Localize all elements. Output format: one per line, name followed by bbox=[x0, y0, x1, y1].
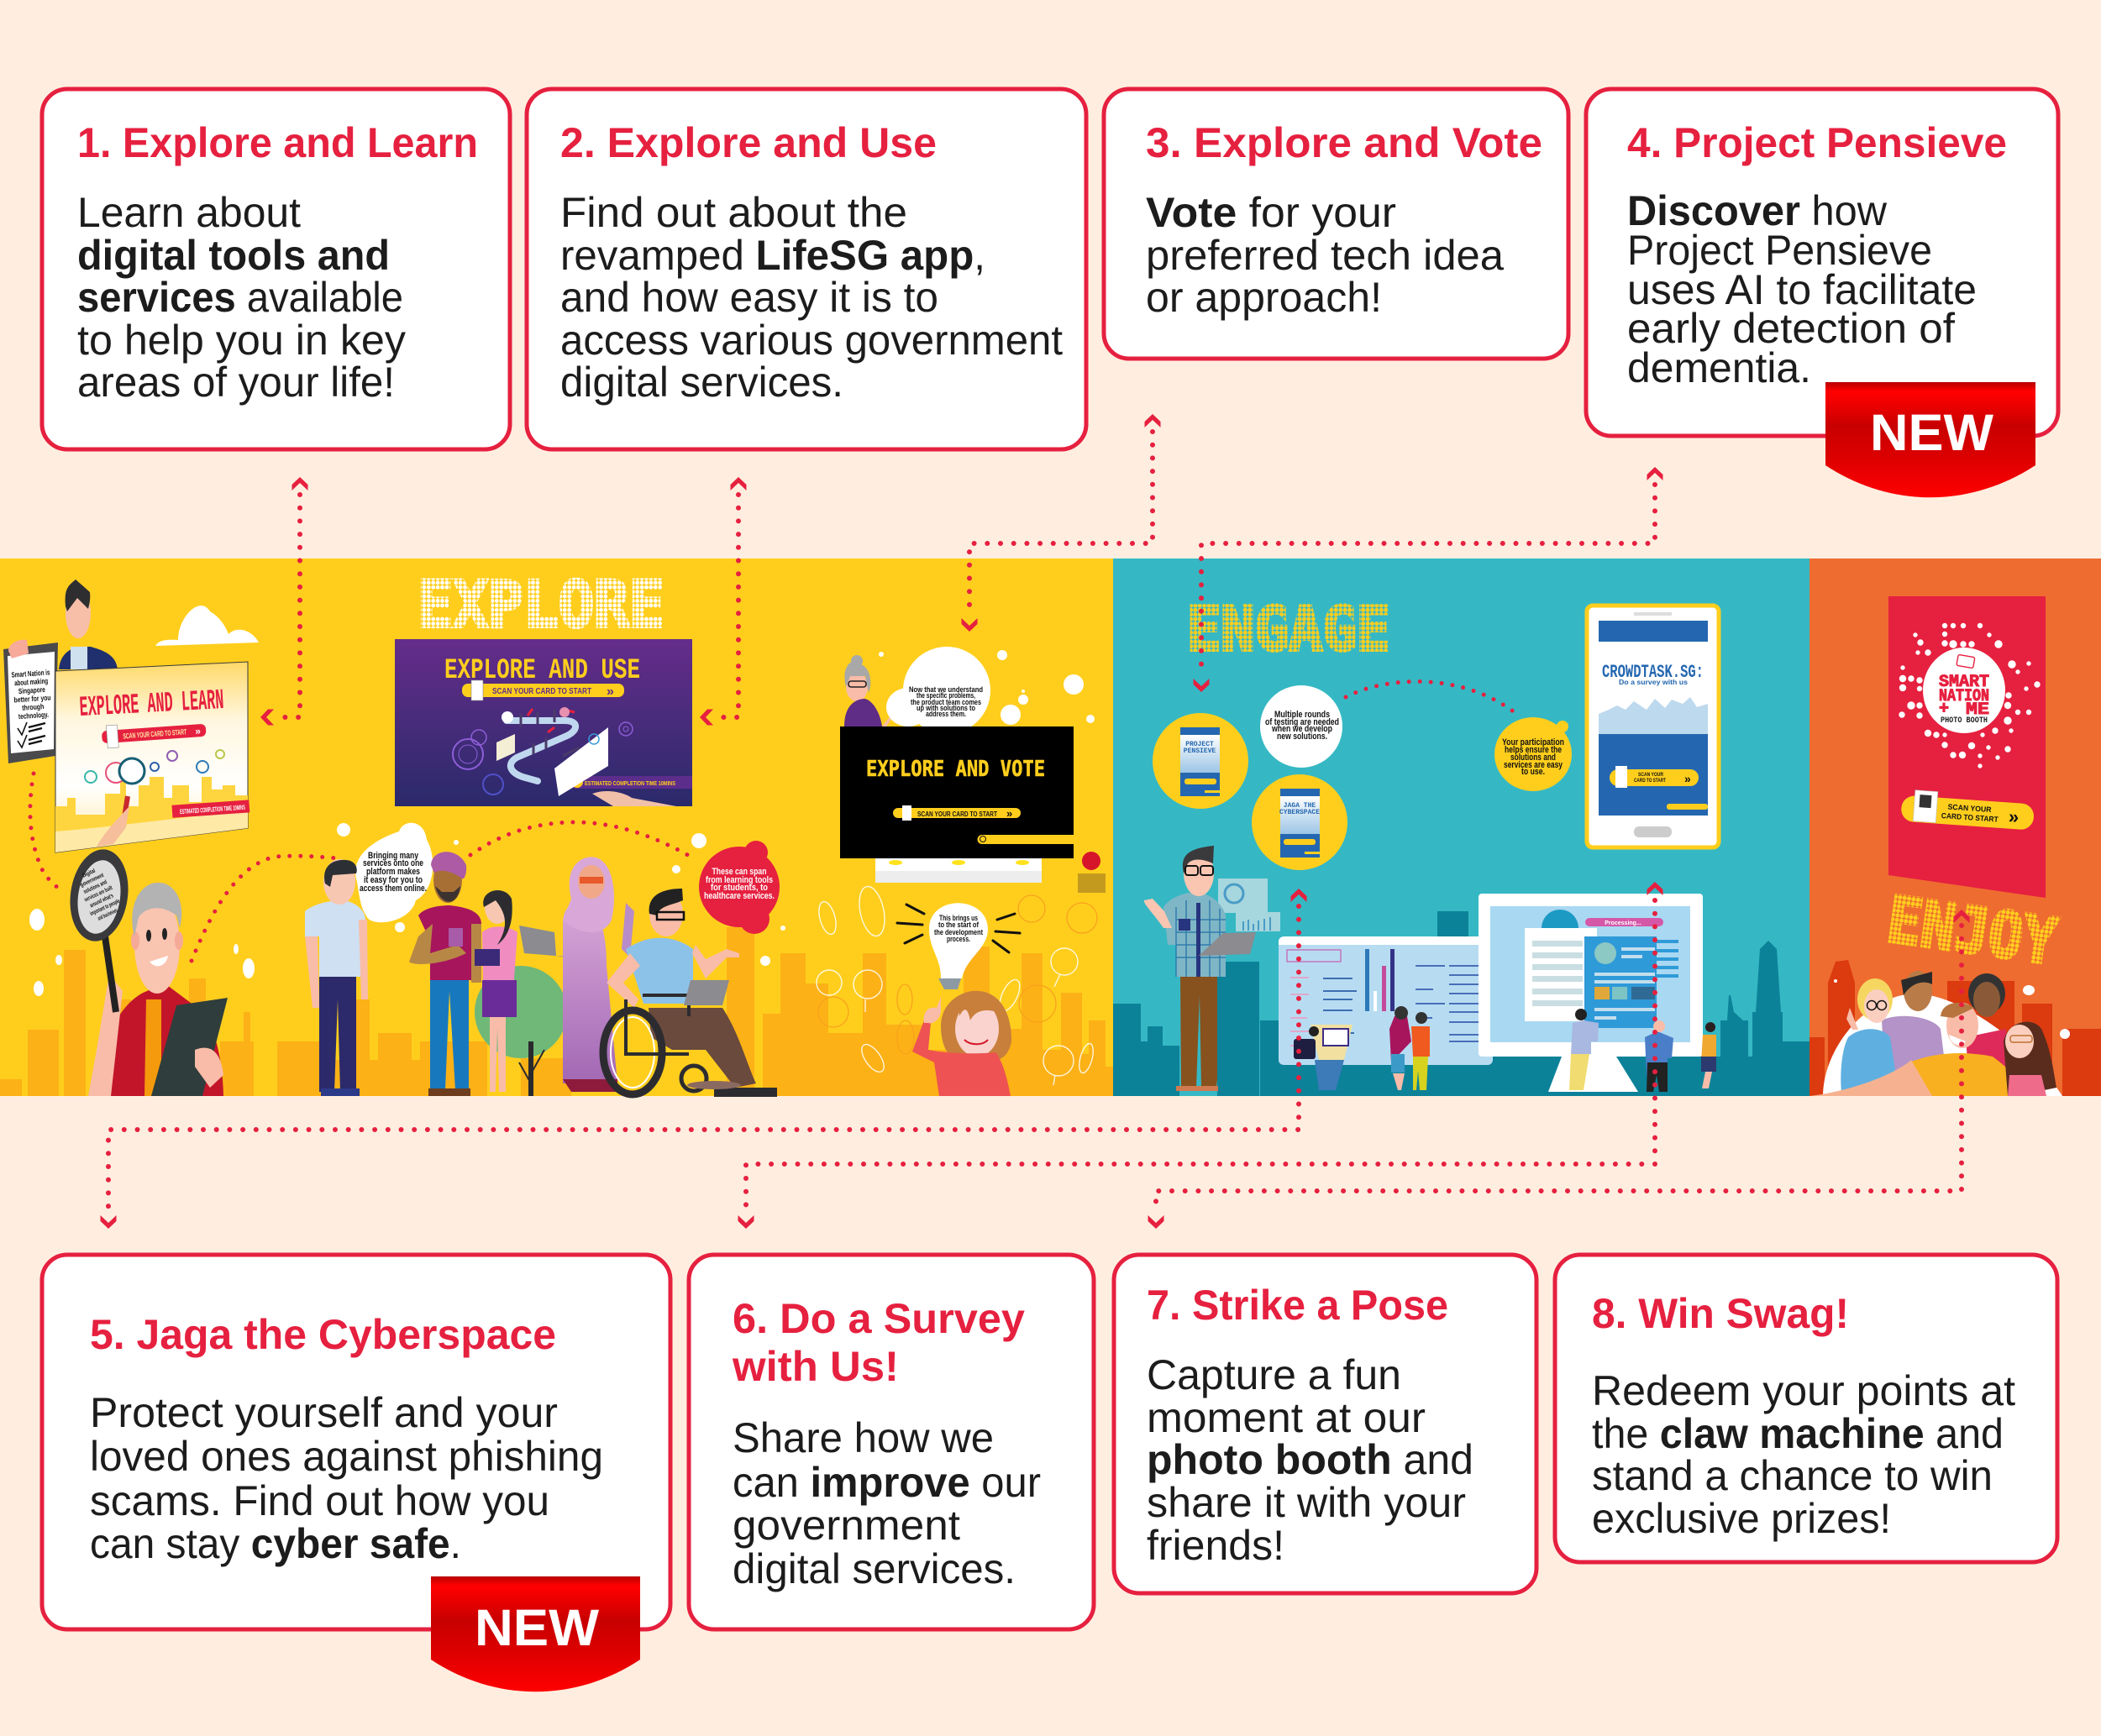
halftone dots bbox=[1899, 623, 2040, 768]
white backdrop bbox=[1823, 994, 2062, 1096]
phone subtitle: Do a survey with us bbox=[1619, 679, 1689, 686]
clipboard text: Smart Nation is bbox=[11, 668, 50, 679]
woman with dark hair bbox=[1966, 973, 2008, 1096]
processing bar bbox=[1585, 918, 1663, 926]
bubble: bringing many services: access them online. bbox=[360, 884, 427, 894]
skyline: explore zone bbox=[0, 927, 1113, 1096]
new ribbon: NEW bbox=[475, 1599, 599, 1656]
circle: jaga the cyberspace: JAGA THE bbox=[1284, 802, 1316, 810]
body text: can improve our bbox=[733, 1459, 1041, 1506]
bubble: your participation: to use. bbox=[1521, 767, 1545, 777]
heading: ENGAGE: ENGAGE bbox=[1187, 594, 1390, 664]
body text: Redeem your points at bbox=[1592, 1367, 2015, 1414]
screen title: EXPLORE AND VOTE bbox=[866, 757, 1045, 782]
bubble: multiple rounds: of testing are needed bbox=[1265, 717, 1339, 727]
estimated time bar: ESTIMATED COMPLETION TIME 10MINS bbox=[180, 804, 245, 816]
faint bulbs bbox=[818, 895, 1097, 1054]
business man bbox=[1645, 1020, 1673, 1092]
body text: exclusive prizes! bbox=[1592, 1495, 1891, 1542]
phone skyline bbox=[1599, 697, 1708, 734]
screen: explore and learn: EXPLORE AND LEARN bbox=[79, 685, 224, 725]
progress bar bbox=[978, 835, 1074, 844]
body text: Learn about bbox=[77, 189, 301, 236]
scan pill bbox=[1900, 789, 2035, 831]
clipboard text: Singapore bbox=[18, 685, 45, 695]
body text: moment at our bbox=[1147, 1394, 1426, 1441]
figure: older man with clipboard bbox=[88, 883, 228, 1096]
body text: Protect yourself and your bbox=[90, 1389, 558, 1436]
dotted link: man to group bbox=[192, 856, 338, 961]
bulb with text: the development bbox=[934, 928, 983, 936]
poster: photo booth bbox=[1888, 596, 2046, 898]
screen: explore and learn bbox=[55, 662, 249, 852]
magnifier text: services are built bbox=[84, 885, 114, 903]
scan pill: » bbox=[607, 684, 614, 699]
body text bbox=[560, 189, 1063, 406]
body text: the claw machine and bbox=[1592, 1410, 2004, 1457]
panel: explore zone bbox=[0, 559, 1113, 1097]
heading: 7. Strike a Pose bbox=[1147, 1282, 1448, 1329]
holographic panels bbox=[1218, 878, 1280, 931]
bulb with text: process. bbox=[947, 935, 970, 943]
dotted link: group to red bubble bbox=[470, 822, 696, 860]
magnifier text: government bbox=[80, 873, 105, 889]
body text bbox=[1627, 187, 1977, 391]
scan pill: » bbox=[2008, 806, 2020, 827]
poster title bbox=[1939, 673, 1989, 726]
body text: government bbox=[733, 1502, 960, 1549]
panel: enjoy zone bbox=[1809, 559, 2101, 1096]
arrow: up to cyberspace bbox=[1290, 889, 1307, 902]
circle: project pensieve: PROJECT bbox=[1185, 741, 1214, 748]
bubble: multiple rounds: new solutions. bbox=[1277, 732, 1327, 742]
body text bbox=[90, 1389, 603, 1567]
panel: card 7 strike a pose bbox=[1114, 1255, 1536, 1593]
new ribbon bbox=[431, 1576, 640, 1691]
bubble: your participation: solutions and bbox=[1510, 753, 1556, 763]
red button bbox=[1082, 852, 1100, 870]
small skyline on screen bbox=[55, 777, 248, 831]
poster title: NATION bbox=[1939, 687, 1989, 706]
body text bbox=[1592, 1367, 2015, 1542]
bulb with text: This brings us bbox=[939, 914, 978, 922]
white dots bbox=[29, 650, 1095, 996]
circle: project pensieve: PENSIEVE bbox=[1184, 747, 1216, 755]
body text: revamped LifeSG app, bbox=[560, 232, 985, 279]
outlined bulbs bbox=[816, 884, 1095, 1085]
poster title: PHOTO BOOTH bbox=[1941, 716, 1988, 726]
bubble: product team: Now that we understand bbox=[909, 685, 983, 694]
new ribbon bbox=[1825, 382, 2035, 497]
body text: dementia. bbox=[1627, 344, 1811, 391]
circle: jaga the cyberspace: CYBERSPACE bbox=[1279, 809, 1320, 816]
time bar text: ESTIMATED COMPLETION TIME 10MINS bbox=[585, 779, 675, 787]
monitor bbox=[1479, 894, 1703, 1092]
bubble: bringing many services: it easy for you to bbox=[364, 875, 423, 885]
body text bbox=[1146, 189, 1504, 321]
panel: card 6 do a survey bbox=[689, 1255, 1094, 1629]
panel: card 1 explore and learn bbox=[42, 89, 510, 449]
magnifier text bbox=[73, 864, 124, 924]
bubble: bringing many services bbox=[355, 823, 433, 922]
bubble: red learning tools: for students, to bbox=[711, 883, 768, 893]
figure: grandmother bbox=[844, 655, 903, 726]
body text: areas of your life! bbox=[77, 359, 395, 406]
magnifier text: solutions and bbox=[82, 879, 108, 895]
heading: 1. Explore and Learn bbox=[77, 119, 478, 166]
panel: card 8 win swag bbox=[1555, 1255, 2057, 1562]
stand under vote screen bbox=[875, 858, 1042, 883]
scan pill: SCAN YOUR CARD TO START bbox=[917, 810, 997, 818]
dotted link: testing to participation bbox=[1346, 681, 1515, 713]
arrow: up to monitor bbox=[1647, 882, 1663, 895]
scan pill bbox=[462, 680, 624, 700]
camera icon bbox=[1957, 654, 1975, 669]
man in orange shirt bbox=[1809, 1003, 2017, 1096]
body text: can stay cyber safe. bbox=[90, 1520, 461, 1567]
body text: photo booth and bbox=[1147, 1436, 1473, 1483]
estimated time bar bbox=[171, 800, 249, 818]
body text: share it with your bbox=[1147, 1479, 1466, 1526]
people at screens bbox=[1389, 1006, 1716, 1092]
arrow: up to card 4 bbox=[1647, 467, 1663, 480]
scan pill: » bbox=[195, 725, 202, 737]
body text: Vote for your bbox=[1146, 189, 1396, 236]
figure: girl bbox=[475, 890, 517, 1092]
scan pill: CARD TO START bbox=[1634, 778, 1666, 784]
heading: 6. Do a Survey bbox=[733, 1295, 1025, 1342]
heading: EXPLORE: EXPLORE bbox=[418, 567, 664, 642]
body text: to help you in key bbox=[77, 317, 406, 364]
bulb with text: to the start of bbox=[938, 920, 980, 929]
body text bbox=[733, 1414, 1041, 1592]
bubble: red learning tools: These can span bbox=[712, 867, 767, 877]
poster title: SMART bbox=[1939, 673, 1989, 692]
bulb with text bbox=[929, 903, 988, 989]
panel: card 3 explore and vote bbox=[1104, 89, 1568, 359]
new ribbon: NEW bbox=[1870, 404, 1993, 461]
bubble: product team: the product team comes bbox=[911, 698, 981, 706]
isometric path illustration bbox=[453, 707, 633, 796]
bubble: multiple rounds: Multiple rounds bbox=[1274, 710, 1330, 720]
man with dark hair bbox=[1882, 971, 1949, 1096]
bubble: bringing many services: services onto one bbox=[363, 858, 423, 868]
screen: explore and use bbox=[395, 639, 692, 806]
bubble: product team: the specific problems, bbox=[917, 691, 975, 700]
figure: woman with idea bbox=[912, 991, 1011, 1096]
icon: big magnifier with text bbox=[65, 846, 134, 1012]
clipboard: smart nation bbox=[3, 640, 58, 763]
figure: woman in hijab bbox=[563, 857, 634, 1092]
skyline: enjoy zone bbox=[1809, 960, 2101, 1096]
dotted connector: card 3 bbox=[961, 414, 1161, 632]
person at desk bbox=[1294, 1025, 1353, 1090]
magnifier text: and businesses. bbox=[97, 907, 119, 922]
heading: ENJOY: ENJOY bbox=[1883, 882, 2062, 979]
arrow: up to card 3 bbox=[1144, 414, 1161, 427]
panel: illustrated exhibition band bbox=[0, 559, 2101, 1097]
panel: card 5 jaga the cyberspace bbox=[42, 1255, 670, 1691]
bubble: red learning tools bbox=[699, 841, 780, 934]
arrow: up to card 2 bbox=[731, 477, 746, 490]
phone title: CROWDTASK.SG: bbox=[1602, 662, 1704, 683]
body text: Share how we bbox=[733, 1414, 994, 1461]
heading: 4. Project Pensieve bbox=[1627, 119, 2007, 166]
scan pill: SCAN YOUR bbox=[1947, 802, 1992, 814]
arrow: left to purple screen bbox=[700, 709, 713, 726]
tree bbox=[475, 966, 567, 1096]
dotted connector: card 1 bbox=[260, 477, 307, 726]
bubble: multiple rounds bbox=[1260, 685, 1342, 768]
arrow: left to screen bbox=[260, 709, 274, 726]
body text: access various government bbox=[560, 317, 1063, 364]
gold box bbox=[1078, 873, 1106, 893]
business woman bbox=[1701, 1022, 1716, 1088]
bubble: product team: address them. bbox=[926, 710, 966, 718]
figure: man in suit bbox=[59, 580, 118, 669]
scan pill: » bbox=[1684, 772, 1691, 785]
hand bbox=[592, 791, 676, 806]
magnifier text: important to people bbox=[89, 899, 121, 917]
dotted connector: card 5 bbox=[101, 889, 1307, 1229]
screen title: EXPLORE AND USE bbox=[444, 655, 640, 687]
scan pill: SCAN YOUR CARD TO START bbox=[123, 727, 187, 741]
body text bbox=[77, 189, 406, 406]
figure: man in wheelchair bbox=[603, 889, 777, 1097]
heading: 2. Explore and Use bbox=[560, 119, 937, 166]
data rows bbox=[1290, 966, 1479, 1046]
arrow: down to vote screen bbox=[961, 618, 978, 632]
dotted connector: card 4 bbox=[1193, 467, 1663, 692]
bubble: bringing many services: platform makes bbox=[366, 867, 420, 877]
bubble: your participation: services are easy bbox=[1504, 760, 1563, 770]
bubble: bringing many services: Bringing many bbox=[368, 851, 419, 861]
body text: stand a chance to win bbox=[1592, 1452, 1993, 1499]
circle: jaga the cyberspace bbox=[1252, 774, 1347, 870]
woman with glasses bbox=[2004, 1022, 2056, 1096]
arrow: down to pensieve bbox=[1193, 679, 1210, 692]
progress bar bbox=[1667, 804, 1708, 810]
clipboard text: through bbox=[22, 702, 45, 712]
scan pill bbox=[893, 805, 1021, 821]
bubble: your participation: helps ensure the bbox=[1505, 745, 1562, 755]
panel: card 2 explore and use bbox=[527, 89, 1086, 449]
body text: uses AI to facilitate bbox=[1627, 266, 1977, 313]
heading bbox=[732, 1295, 1025, 1390]
clipboard text: about making bbox=[14, 677, 48, 687]
scan pill: SCAN YOUR bbox=[1638, 772, 1663, 778]
bubble: your participation bbox=[1494, 717, 1572, 791]
body text bbox=[1147, 1351, 1473, 1569]
figure: man in white shirt bbox=[305, 859, 368, 1096]
white dots bbox=[1834, 979, 2070, 1039]
body text: or approach! bbox=[1146, 274, 1382, 321]
bubble: product team: up with solutions to bbox=[917, 704, 975, 712]
magnifier text: Digital bbox=[81, 868, 97, 879]
body text: digital services. bbox=[733, 1545, 1016, 1592]
body text: early detection of bbox=[1627, 305, 1955, 352]
clipboard text: better for you bbox=[13, 693, 51, 704]
dotted connector: card 7 bbox=[1148, 910, 1969, 1229]
icons on screen bbox=[85, 750, 224, 783]
heading: with Us! bbox=[732, 1343, 899, 1390]
circle: project pensieve bbox=[1153, 713, 1248, 809]
pair at dashboard bbox=[1389, 1006, 1430, 1090]
bubble: red learning tools: from learning tools bbox=[706, 875, 773, 885]
arrow: down to card 5 bbox=[101, 1215, 116, 1229]
body text: digital services. bbox=[560, 359, 843, 406]
scan pill: » bbox=[1006, 807, 1012, 820]
dashboard bbox=[1279, 936, 1493, 1090]
body text: Capture a fun bbox=[1147, 1351, 1401, 1398]
body text: Find out about the bbox=[560, 189, 907, 236]
arrow: up to card 1 bbox=[292, 477, 307, 490]
poster title: + bbox=[1939, 700, 1949, 719]
body text: loved ones against phishing bbox=[90, 1433, 603, 1480]
dotted connector: card 6 bbox=[738, 882, 1663, 1229]
body text: scams. Find out how you bbox=[90, 1477, 549, 1524]
heading: 5. Jaga the Cyberspace bbox=[90, 1311, 556, 1358]
heading: 8. Win Swag! bbox=[1592, 1290, 1849, 1337]
panel: card 4 project pensieve bbox=[1586, 89, 2058, 497]
figure: man in turban bbox=[409, 852, 481, 1096]
chart bars bbox=[1365, 949, 1395, 1011]
heading: 3. Explore and Vote bbox=[1146, 119, 1542, 166]
clipboard text bbox=[11, 668, 53, 721]
arrow: down to card 7 bbox=[1148, 1215, 1164, 1229]
body text: friends! bbox=[1147, 1522, 1284, 1569]
scan pill bbox=[1610, 766, 1699, 788]
magnifier on screen bbox=[97, 758, 144, 847]
decorative clouds bbox=[155, 606, 259, 742]
dotted connector: card 2 bbox=[700, 477, 746, 726]
body text: digital tools and bbox=[77, 232, 390, 279]
monitor: Processing... bbox=[1605, 920, 1641, 926]
body text: services available bbox=[77, 274, 403, 321]
figure: man with glasses bbox=[1144, 846, 1256, 1091]
arrow: up to enjoy bbox=[1954, 910, 1969, 923]
magnifier text: around what's bbox=[89, 893, 114, 909]
figure at monitor bbox=[1569, 1009, 1599, 1090]
bulb rays bbox=[897, 905, 1020, 952]
bubble: product team bbox=[886, 647, 990, 734]
body text: Project Pensieve bbox=[1627, 227, 1932, 274]
bubble: multiple rounds: when we develop bbox=[1271, 724, 1332, 734]
body text: Discover how bbox=[1627, 187, 1888, 234]
laptop: grey bbox=[519, 926, 575, 957]
dotted link: clipboard to man bbox=[30, 774, 64, 892]
body text: and how easy it is to bbox=[560, 274, 938, 321]
bubble: your participation: Your participation bbox=[1502, 737, 1564, 747]
scan pill bbox=[101, 719, 207, 748]
clipboard text: technology. bbox=[18, 711, 49, 721]
body text: preferred tech idea bbox=[1146, 232, 1504, 279]
arrow: down to card 6 bbox=[738, 1215, 754, 1229]
phone: crowdtask bbox=[1587, 606, 1719, 847]
bubble: red learning tools: healthcare services. bbox=[704, 891, 775, 901]
scan pill: SCAN YOUR CARD TO START bbox=[492, 687, 591, 696]
scan pill: CARD TO START bbox=[1941, 811, 1999, 824]
skyline: engage zone bbox=[1113, 911, 1809, 1096]
blonde woman bbox=[1841, 978, 1899, 1092]
group of friends bbox=[1809, 971, 2056, 1096]
poster title: ME bbox=[1966, 700, 1989, 720]
panel: engage zone bbox=[1113, 559, 1809, 1096]
stand lights bbox=[889, 860, 1029, 865]
screen: explore and vote bbox=[840, 726, 1074, 858]
